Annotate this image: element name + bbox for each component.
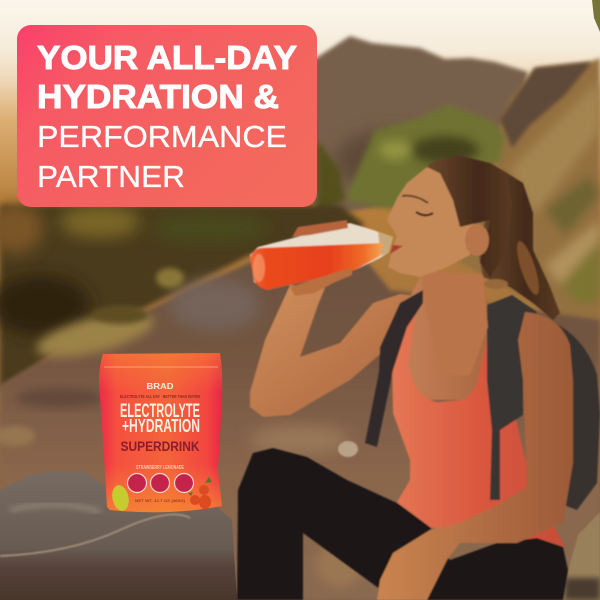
ground texture [0, 426, 35, 446]
dry grass [33, 304, 157, 366]
woman [237, 155, 600, 600]
pouch tagline: ELECTROLYTE ALL DAY · BETTER THAN WATER [120, 394, 201, 399]
raised arm [250, 285, 420, 417]
headline line 1: YOUR ALL-DAY [37, 40, 297, 77]
pouch title line 2: +HYDRATION [122, 416, 200, 436]
neck [420, 270, 488, 375]
icon: strawberries [188, 477, 212, 509]
tree top right [592, 0, 600, 32]
far mountain [310, 36, 528, 215]
near arm [377, 312, 573, 600]
pouch fine print: NET WT. 12.7 OZ (360G) [135, 499, 185, 503]
ponytail [478, 163, 560, 320]
pouch badges [128, 474, 194, 492]
thumb under bottle [290, 268, 352, 296]
icon: lemon [110, 484, 131, 512]
fingers on bottle [292, 220, 348, 237]
backpack [540, 318, 600, 510]
hair [427, 155, 512, 278]
eyebrow [402, 196, 428, 203]
headline line 3: PERFORMANCE [37, 119, 287, 154]
right hillside [420, 58, 600, 340]
green trees [345, 105, 505, 210]
headline panel [17, 25, 317, 207]
headline line 4: PARTNER [37, 159, 185, 194]
left strap [365, 290, 423, 447]
pouch title line 3: SUPERDRINK [120, 439, 200, 454]
pouch flavor: STRAWBERRY LEMONADE [136, 465, 184, 471]
right strap [487, 295, 537, 500]
left dark bushes [0, 205, 365, 390]
mouth [390, 245, 403, 254]
legs and leggings [237, 448, 568, 600]
torso skin [385, 277, 495, 400]
rock [0, 471, 237, 600]
tank top [392, 308, 565, 547]
pouch brand: BRAD [146, 382, 174, 391]
pouch title line 1: ELECTROLYTE [120, 401, 200, 422]
boulder bottom right [560, 512, 600, 600]
face [387, 167, 475, 277]
ground [0, 240, 600, 600]
bottle [250, 223, 393, 290]
closed eye [416, 212, 433, 215]
headline line 2: HYDRATION & [37, 79, 279, 116]
ear [465, 224, 489, 256]
product pouch [99, 353, 222, 512]
